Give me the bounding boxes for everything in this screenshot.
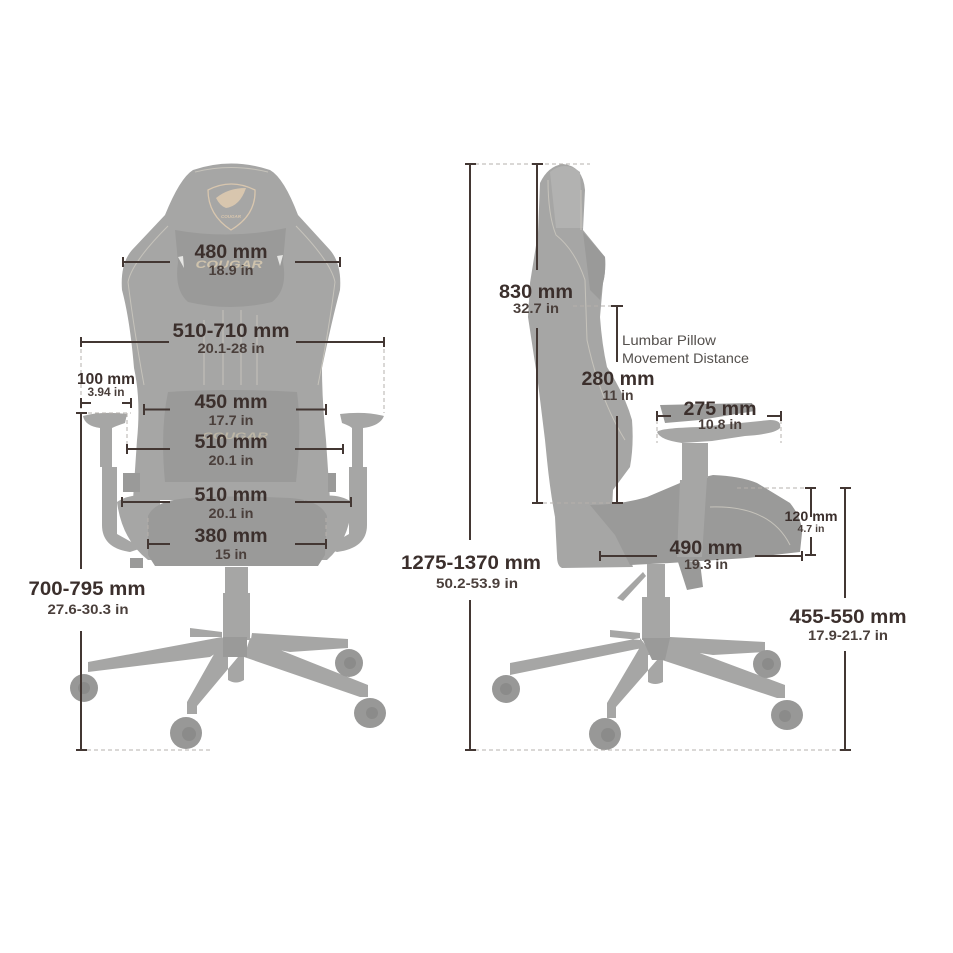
seat lever bbox=[130, 558, 143, 568]
side cylinder bbox=[642, 564, 670, 640]
label: overall height: 1275-1370 mm bbox=[401, 552, 541, 574]
label: seat thickness: 120 mm bbox=[784, 509, 838, 525]
label: armrest height: 27.6-30.3 in bbox=[48, 601, 128, 617]
adjust lever bbox=[617, 572, 646, 601]
headrest slots bbox=[178, 255, 283, 268]
label: lumbar width: 17.7 in bbox=[208, 412, 254, 428]
label: backrest height: 32.7 in bbox=[513, 300, 559, 316]
label: lumbar distance bbox=[582, 368, 654, 403]
label: backrest height bbox=[499, 281, 573, 316]
label: seat width: 510 mm bbox=[194, 484, 268, 506]
label: backrest lower width: 20.1 in bbox=[208, 452, 254, 468]
label: seat height: 17.9-21.7 in bbox=[808, 627, 888, 643]
seat wings bbox=[117, 495, 352, 560]
label: armrest adjust bbox=[77, 371, 135, 399]
label: backrest lower width bbox=[194, 431, 268, 468]
label: armrest adjust: 100 mm bbox=[77, 371, 135, 388]
label: shoulder width: 510-710 mm bbox=[172, 320, 290, 342]
logo shield: COUGAR bbox=[221, 214, 242, 219]
headrest pillow bbox=[175, 228, 286, 307]
label: seat width: 20.1 in bbox=[208, 505, 254, 521]
label: backrest top width: 18.9 in bbox=[208, 262, 254, 278]
label: lumbar distance: 11 in bbox=[602, 387, 634, 403]
right armrest bbox=[325, 413, 384, 552]
seat cushion bbox=[148, 496, 327, 566]
label: overall height: 50.2-53.9 in bbox=[436, 575, 518, 591]
label: lumbar distance: 280 mm bbox=[582, 368, 654, 390]
front gas cylinder bbox=[223, 567, 250, 640]
label: shoulder width bbox=[172, 320, 290, 356]
label: armrest adjust: 3.94 in bbox=[88, 385, 124, 399]
front base star bbox=[88, 628, 368, 714]
label: lumbar pillow movement bbox=[622, 332, 749, 366]
label: seat inner width: 380 mm bbox=[194, 525, 268, 547]
front view dimension lines bbox=[76, 257, 384, 750]
side hub bbox=[642, 638, 670, 660]
side base star bbox=[510, 630, 785, 718]
label: seat inner width bbox=[194, 525, 268, 562]
label: seat depth: 490 mm bbox=[670, 537, 742, 559]
side armrest top pad bbox=[660, 403, 755, 423]
label: armrest height bbox=[28, 578, 146, 617]
label: armrest length: 275 mm bbox=[684, 398, 756, 420]
label: backrest height: 830 mm bbox=[499, 281, 573, 303]
lumbar pillow side bbox=[583, 232, 605, 300]
label: backrest lower width: 510 mm bbox=[194, 431, 268, 453]
label: seat height bbox=[790, 606, 906, 643]
side headrest bbox=[550, 166, 583, 228]
left armrest bbox=[83, 413, 142, 552]
side seat shell bbox=[555, 505, 633, 568]
front casters bbox=[70, 649, 386, 749]
label: lumbar width: 450 mm bbox=[194, 391, 268, 413]
side view dimension lines bbox=[465, 164, 851, 750]
side view chair bbox=[492, 164, 803, 750]
headrest brand: COUGAR bbox=[196, 259, 263, 271]
label: armrest length bbox=[684, 398, 756, 432]
side stitching bbox=[548, 180, 625, 440]
side armrest lower pad bbox=[657, 420, 780, 443]
front backrest bbox=[122, 164, 340, 500]
side backrest bbox=[528, 164, 633, 517]
label: shoulder width: 20.1-28 in bbox=[198, 340, 264, 356]
label: seat inner width: 15 in bbox=[215, 546, 247, 562]
label: armrest length: 10.8 in bbox=[698, 416, 742, 432]
label: seat thickness: 4.7 in bbox=[798, 523, 824, 535]
label: seat depth: 19.3 in bbox=[684, 556, 728, 572]
label: seat depth bbox=[670, 537, 742, 572]
label: armrest height: 700-795 mm bbox=[28, 578, 146, 600]
side armrest post bbox=[677, 443, 708, 557]
label: backrest top width: 480 mm bbox=[194, 241, 268, 263]
label: seat width bbox=[194, 484, 268, 521]
front backrest stitching bbox=[128, 168, 335, 385]
label: overall height bbox=[401, 552, 541, 591]
logo shield bbox=[208, 184, 255, 230]
side casters bbox=[492, 650, 803, 750]
side seat bbox=[590, 475, 802, 565]
tilt knob bbox=[678, 562, 703, 590]
backrest ribs bbox=[204, 310, 257, 385]
side brackets bbox=[123, 473, 336, 492]
lumbar pillow bbox=[163, 390, 299, 482]
front view chair bbox=[70, 164, 386, 749]
label: backrest top width bbox=[194, 241, 268, 278]
label: lumbar pillow movement: Movement Distance bbox=[622, 350, 749, 366]
side seat stitch bbox=[710, 507, 790, 545]
label: seat thickness bbox=[784, 509, 838, 535]
front hub bbox=[223, 637, 247, 657]
label: lumbar width bbox=[194, 391, 268, 428]
label: lumbar pillow movement: Lumbar Pillow bbox=[622, 332, 717, 348]
label: seat height: 455-550 mm bbox=[790, 606, 906, 628]
lumbar brand: COUGAR bbox=[202, 431, 269, 441]
